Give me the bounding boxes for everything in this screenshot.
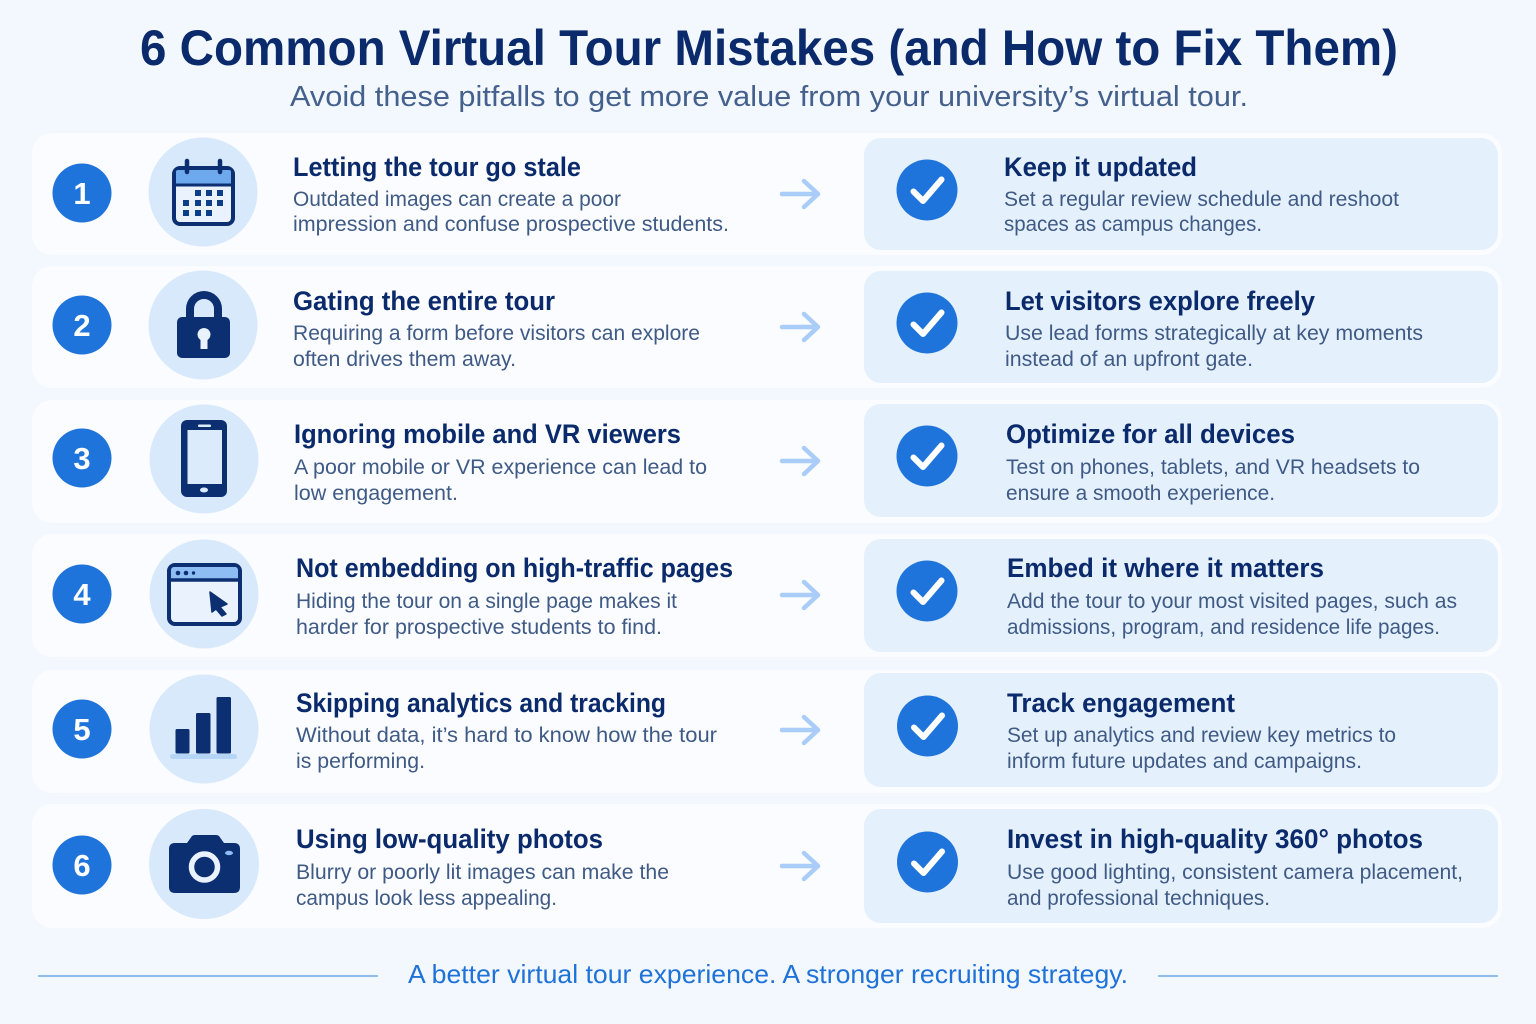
mistake 2 text: often drives them away. [293, 347, 516, 371]
icon: camera [149, 809, 259, 919]
check icon [896, 292, 958, 354]
mistake 1 text: Outdated images can create a poor [293, 187, 621, 211]
fix 4 text: Embed it where it matters [1007, 553, 1324, 583]
number badge 3 [52, 428, 112, 488]
number badge 2: 2 [73, 308, 91, 343]
arrow [782, 448, 818, 474]
icon: bar chart [150, 674, 258, 784]
fix 6 text [1007, 824, 1463, 910]
row card [32, 534, 1502, 657]
mistake 6 text: Blurry or poorly lit images can make the [296, 860, 669, 884]
fix 2 text: Use lead forms strategically at key moments [1005, 321, 1423, 345]
fix 1 text: Set a regular review schedule and reshoot [1004, 187, 1399, 211]
fix 1 text: Keep it updated [1004, 152, 1197, 182]
check icon [896, 160, 958, 220]
row 4: embedding [32, 534, 1502, 657]
mistake 4 text [296, 553, 733, 639]
fix 3 text: ensure a smooth experience. [1006, 481, 1275, 505]
check icon [897, 696, 958, 756]
title: 6 Common Virtual Tour Mistakes (and How to Fix Them) [140, 20, 1398, 76]
number badge 1 [52, 164, 112, 222]
mistake 5 text: Without data, it’s hard to know how the tour [296, 723, 717, 747]
footer tagline: A better virtual tour experience. A stronger recruiting strategy. [408, 959, 1128, 989]
mistake 3 text: low engagement. [294, 481, 458, 505]
row 2: gated tour [32, 266, 1502, 388]
check icon [897, 832, 958, 892]
mistake 2 text [293, 286, 700, 371]
mistake 4 text: Not embedding on high-traffic pages [296, 553, 733, 583]
fix panel 3 [864, 404, 1498, 517]
row card [32, 133, 1502, 255]
number badge 1: 1 [73, 176, 91, 211]
fix 4 text: admissions, program, and residence life pages. [1007, 615, 1440, 639]
mistake 4 text: Hiding the tour on a single page makes it [296, 589, 677, 613]
arrow [782, 314, 818, 340]
mistake 6 text: campus look less appealing. [296, 886, 557, 910]
fix 5 text: Track engagement [1007, 688, 1235, 718]
mistake 4 text: harder for prospective students to find. [296, 615, 662, 639]
row 1: stale tour [32, 133, 1502, 255]
mistake 3 text [294, 419, 707, 505]
mistake 1 text: impression and confuse prospective students. [293, 212, 729, 236]
icon: lock [148, 270, 258, 380]
mistake 3 text: A poor mobile or VR experience can lead to [294, 455, 707, 479]
fix 1 text [1004, 152, 1399, 236]
fix panel 4 [864, 539, 1498, 652]
row card [32, 266, 1502, 388]
check icon [896, 560, 958, 622]
mistake 5 text: Skipping analytics and tracking [296, 688, 666, 718]
fix 6 text: Use good lighting, consistent camera placement, [1007, 860, 1463, 884]
fix 1 text: spaces as campus changes. [1004, 212, 1262, 236]
row card [32, 400, 1502, 523]
fix 4 text: Add the tour to your most visited pages, such as [1007, 589, 1457, 613]
number badge 5: 5 [73, 712, 91, 747]
fix panel 1 [864, 138, 1498, 250]
mistake 3 text: Ignoring mobile and VR viewers [294, 419, 681, 449]
number badge 2 [52, 296, 112, 354]
fix 4 text [1007, 553, 1457, 639]
arrow [782, 181, 818, 207]
fix 5 text [1007, 688, 1396, 773]
icon: phone [150, 404, 258, 514]
fix panel 2 [864, 271, 1498, 383]
mistake 5 text: is performing. [296, 749, 425, 773]
row card [32, 670, 1502, 793]
arrow [782, 582, 818, 608]
mistake 1 text [293, 152, 729, 236]
number badge 4 [52, 564, 112, 624]
mistake 6 text [296, 824, 669, 910]
mistake 6 text: Using low-quality photos [296, 824, 603, 854]
number badge 3: 3 [73, 441, 91, 476]
fix 5 text: inform future updates and campaigns. [1007, 749, 1362, 773]
fix panel 5 [864, 673, 1498, 787]
subtitle: Avoid these pitfalls to get more value from your university’s virtual tour. [290, 81, 1248, 113]
fix 3 text: Optimize for all devices [1006, 419, 1295, 449]
icon: browser window [150, 540, 258, 648]
fix 2 text: instead of an upfront gate. [1005, 347, 1253, 371]
fix 3 text [1006, 419, 1420, 505]
fix 5 text: Set up analytics and review key metrics to [1007, 723, 1396, 747]
mistake 2 text: Requiring a form before visitors can explore [293, 321, 700, 345]
mistake 1 text: Letting the tour go stale [293, 152, 581, 182]
check icon [896, 426, 958, 486]
number badge 4: 4 [73, 577, 91, 612]
row 5: analytics [32, 670, 1502, 793]
arrow [782, 853, 818, 879]
number badge 6: 6 [73, 848, 91, 883]
mistake 2 text: Gating the entire tour [293, 286, 555, 316]
fix 6 text: and professional techniques. [1007, 886, 1270, 910]
fix 2 text [1005, 286, 1423, 371]
mistake 5 text [296, 688, 717, 773]
fix 2 text: Let visitors explore freely [1005, 286, 1315, 316]
fix panel 6 [864, 809, 1498, 923]
row 3: mobile and VR [32, 400, 1502, 523]
number badge 6 [52, 836, 112, 894]
row card [32, 804, 1502, 928]
row 6: photo quality [32, 804, 1502, 928]
icon: calendar [148, 138, 258, 246]
fix 3 text: Test on phones, tablets, and VR headsets to [1006, 455, 1420, 479]
number badge 5 [52, 700, 112, 758]
arrow [782, 717, 818, 743]
fix 6 text: Invest in high-quality 360° photos [1007, 824, 1423, 854]
